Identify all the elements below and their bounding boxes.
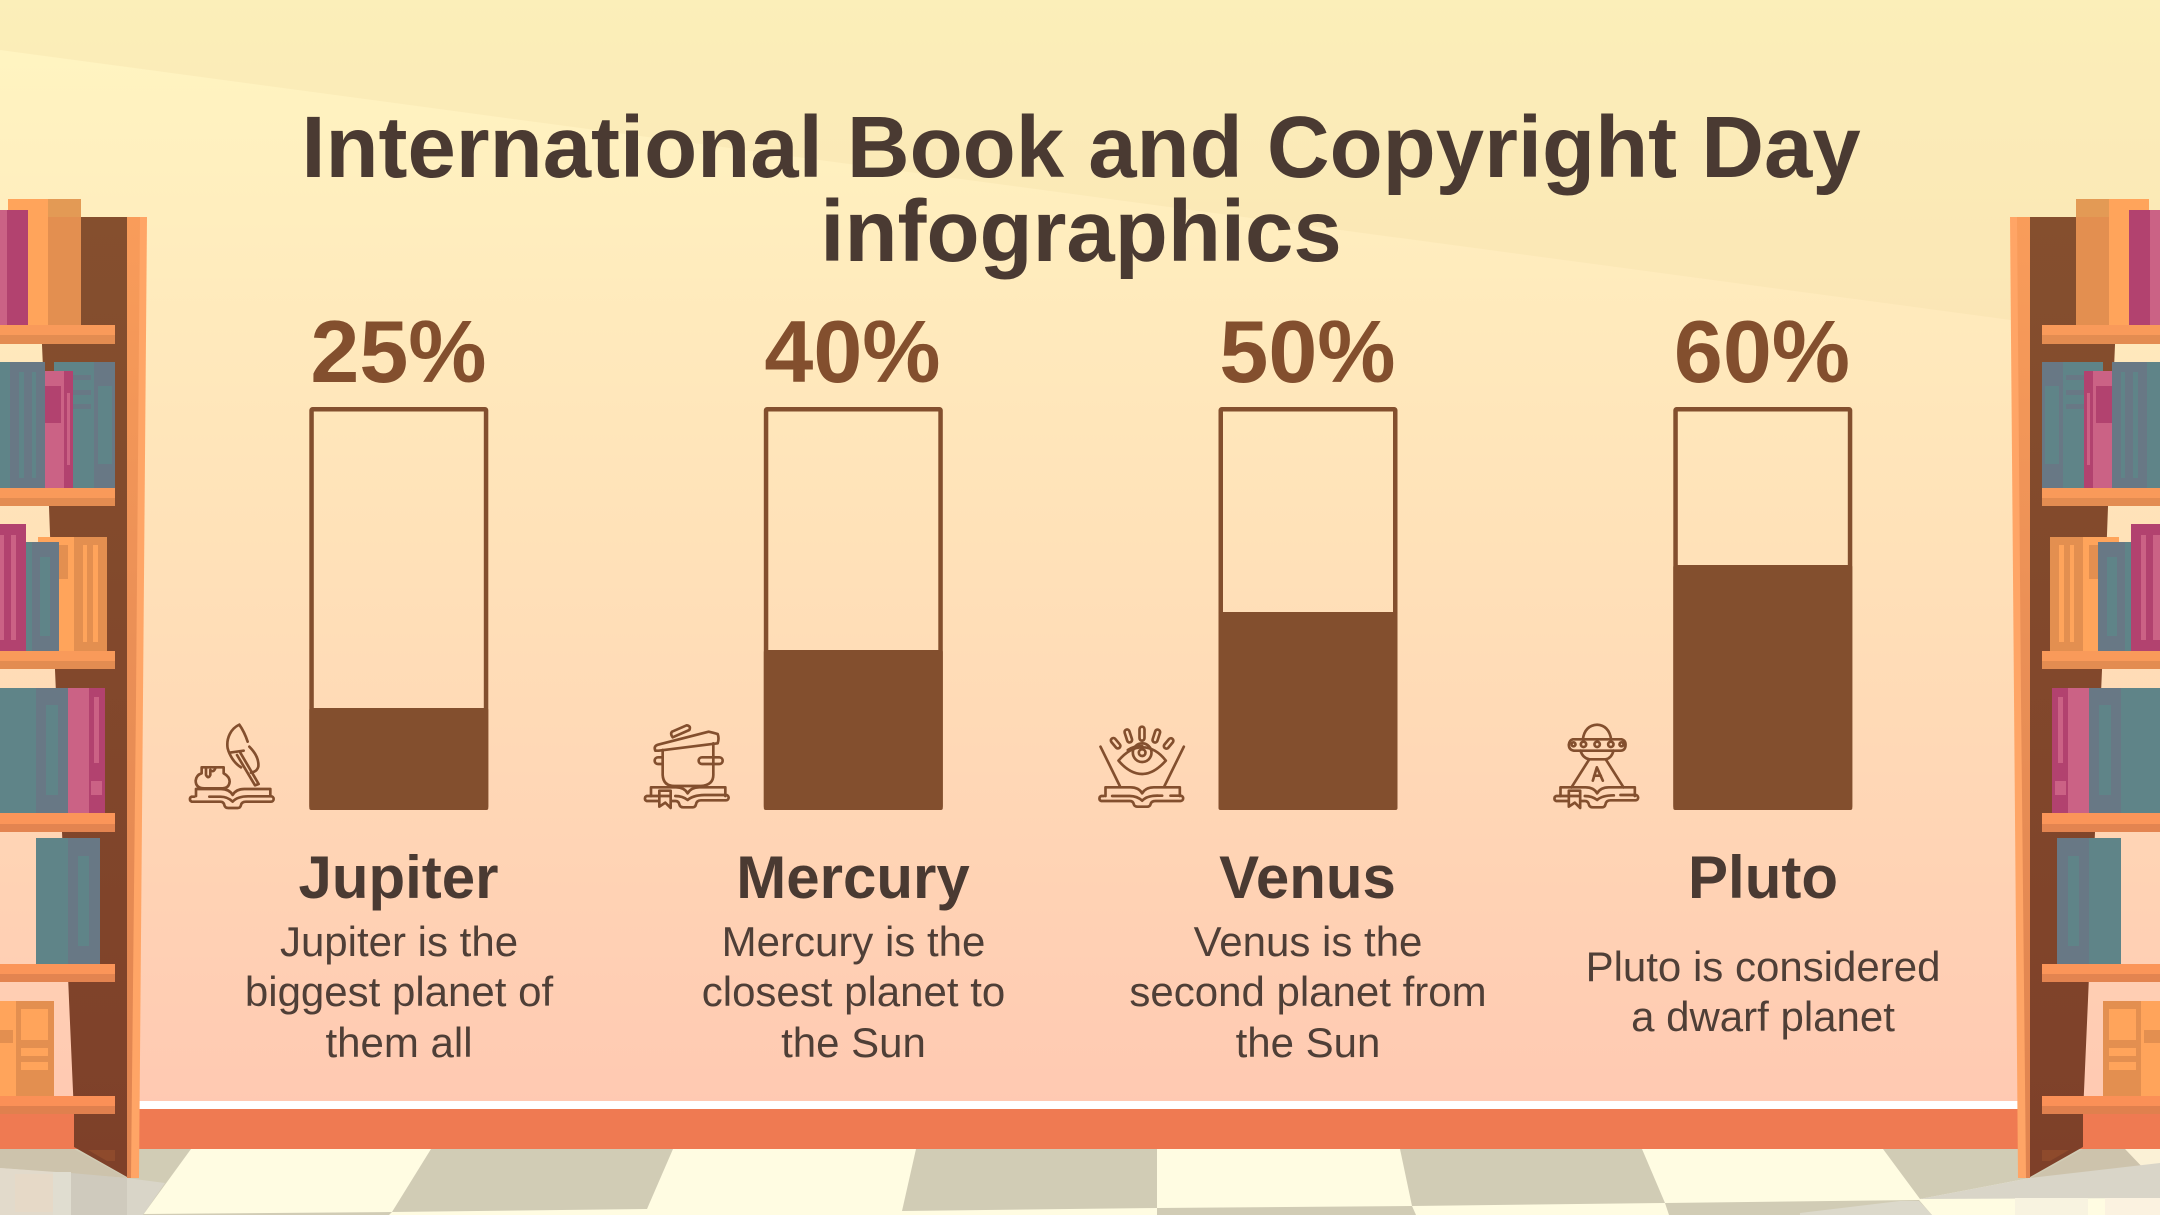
books: row 1 <box>0 199 81 325</box>
shelf back panel <box>35 217 127 1177</box>
description: Mercury <box>702 918 1005 1066</box>
description: Pluto: Pluto is considered <box>1586 943 1940 990</box>
column: Pluto <box>1554 302 1940 1040</box>
label: Mercury: Mercury <box>736 844 970 911</box>
description: Jupiter: them all <box>325 1019 473 1066</box>
description: Venus <box>1129 918 1487 1066</box>
title: infographics <box>820 183 1342 280</box>
bar: 25% <box>309 409 488 810</box>
checkered floor <box>0 1149 2160 1215</box>
label: Jupiter: Jupiter <box>298 844 499 911</box>
description: Mercury: closest planet to <box>702 968 1005 1015</box>
label: Venus: Venus <box>1219 844 1396 911</box>
icon: quill, ink pot and book <box>190 725 274 808</box>
description: Jupiter: biggest planet of <box>245 968 553 1015</box>
books: row 4 <box>0 688 105 813</box>
icon: UFO and book <box>1554 725 1638 808</box>
description: Pluto <box>1586 943 1940 1040</box>
description: Mercury: the Sun <box>781 1019 926 1066</box>
label: Pluto: Pluto <box>1688 844 1838 911</box>
bar: 50% <box>1218 409 1398 810</box>
title: International Book and Copyright Day <box>301 99 1861 196</box>
icon: pot and book <box>645 725 729 808</box>
column: Jupiter <box>190 302 553 1066</box>
shelf side board <box>127 217 147 1178</box>
percentage: 25%: 25% <box>310 302 487 401</box>
description: Venus: Venus is the <box>1194 918 1422 965</box>
books: row 5 <box>36 838 100 964</box>
description: Venus: the Sun <box>1236 1019 1380 1066</box>
icon: eye and book <box>1099 727 1184 807</box>
description: Pluto: a dwarf planet <box>1631 993 1895 1040</box>
books: row 6 <box>0 1001 54 1096</box>
bar: 60% <box>1673 409 1852 810</box>
column: Mercury <box>645 302 1005 1066</box>
shelf planks <box>0 325 115 1114</box>
description: Jupiter: Jupiter is the <box>280 918 518 965</box>
books: row 2 <box>0 362 115 488</box>
column: Venus <box>1099 302 1487 1066</box>
description: Jupiter <box>245 918 553 1066</box>
description: Mercury: Mercury is the <box>722 918 985 965</box>
bookshelf: left <box>0 199 147 1178</box>
baseboard <box>0 1101 2160 1149</box>
right floor reflection <box>1883 1149 2160 1215</box>
description: Venus: second planet from <box>1129 968 1487 1015</box>
percentage: 40%: 40% <box>764 302 941 401</box>
bookshelf: right <box>2010 199 2160 1178</box>
bar: 40% <box>764 409 943 810</box>
percentage: 60%: 60% <box>1674 302 1850 401</box>
title <box>301 99 1861 280</box>
books: row 3 <box>0 524 107 651</box>
percentage: 50%: 50% <box>1219 302 1396 401</box>
left floor reflection <box>0 1149 191 1215</box>
